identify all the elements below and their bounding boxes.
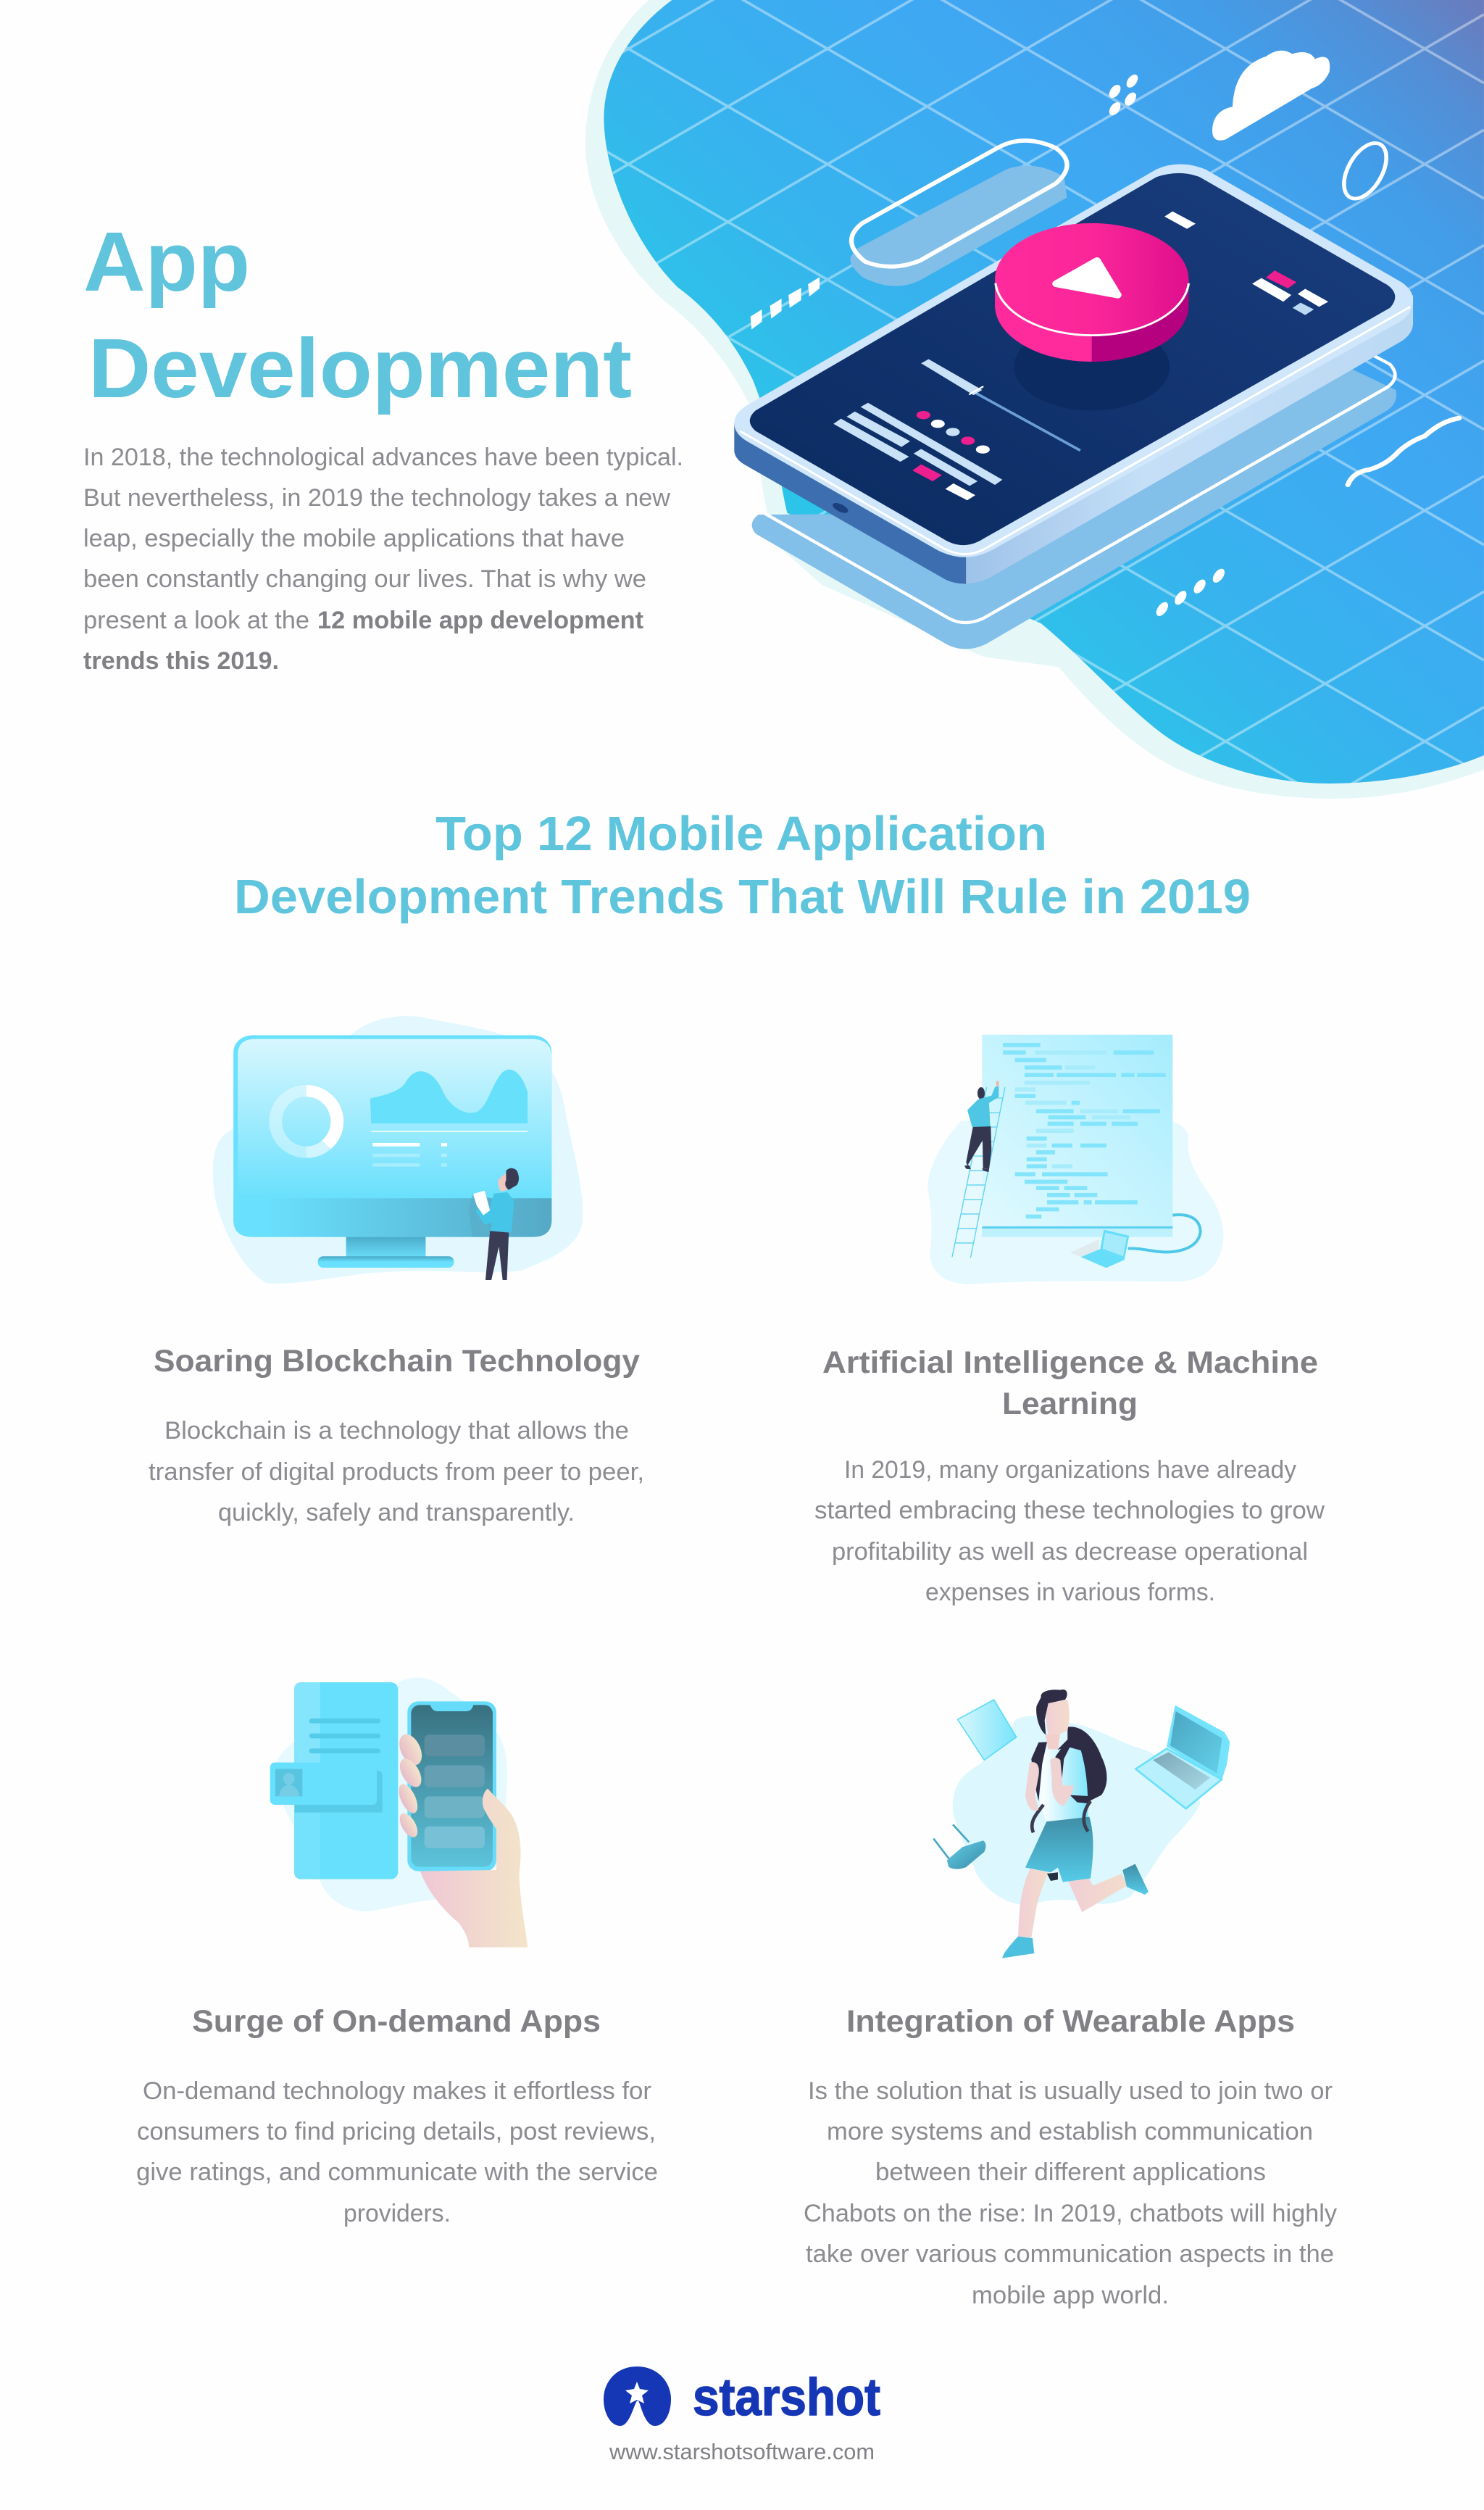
card text: transfer of digital products from peer to peer, bbox=[149, 1458, 644, 1486]
dangling straps bbox=[1032, 1801, 1091, 1832]
card text bbox=[136, 2077, 658, 2227]
intro text block: But nevertheless, in 2019 the technology takes a new bbox=[83, 484, 670, 512]
blue gradient blob bbox=[604, 0, 1484, 784]
panel: wearable apps bbox=[804, 1690, 1337, 2309]
title: Development bbox=[88, 321, 632, 415]
card text: In 2019, many organizations have already bbox=[844, 1456, 1296, 1484]
hero illustration: phone on isometric grid bbox=[585, 0, 1484, 799]
card text bbox=[814, 1456, 1325, 1606]
laptop bbox=[1070, 1230, 1129, 1268]
card text: profitability as well as decrease operational bbox=[832, 1538, 1308, 1566]
monitor stand bbox=[318, 1237, 454, 1268]
monitor body bbox=[233, 1035, 551, 1237]
faint code lines bbox=[1015, 1050, 1130, 1168]
intro text block: trends this 2019. bbox=[83, 647, 279, 675]
right strap bbox=[1056, 1740, 1070, 1790]
panel: artificial intelligence bbox=[814, 1035, 1325, 1606]
card text: take over various communication aspects in the bbox=[806, 2240, 1334, 2268]
icon: lower dots bbox=[1154, 567, 1227, 618]
icon: wavy line bbox=[1348, 418, 1459, 485]
code page bbox=[982, 1035, 1172, 1237]
card text: quickly, safely and transparently. bbox=[218, 1499, 575, 1526]
panel: on-demand apps bbox=[136, 1677, 658, 2227]
person on ladder bbox=[964, 1081, 999, 1172]
backdrop blob bbox=[928, 1121, 1223, 1284]
panel: blockchain bbox=[149, 1016, 644, 1526]
backdrop blob bbox=[953, 1716, 1201, 1905]
back ladder bbox=[988, 1087, 1007, 1225]
icon: dashes bbox=[751, 277, 820, 329]
backpack bbox=[1056, 1726, 1106, 1803]
hair bbox=[1036, 1690, 1067, 1734]
legend rows bbox=[372, 1143, 447, 1167]
phone bbox=[734, 165, 1413, 584]
speaker slot bbox=[831, 501, 850, 515]
icon: starshot mark bbox=[604, 2366, 671, 2426]
tablet bbox=[958, 1700, 1017, 1760]
title: App bbox=[83, 215, 250, 309]
card text: Blockchain is a technology that allows the bbox=[164, 1417, 629, 1445]
pill shape bbox=[850, 141, 1067, 286]
intro text block: In 2018, the technological advances have been typical. bbox=[83, 444, 683, 471]
router bbox=[933, 1824, 985, 1869]
card title: Integration of Wearable Apps bbox=[846, 2004, 1295, 2039]
back shoe bbox=[1122, 1864, 1149, 1895]
person with paper bbox=[469, 1168, 519, 1280]
backdrop blob bbox=[273, 1677, 507, 1911]
section heading: Development Trends That Will Rule in 2019 bbox=[234, 870, 1251, 924]
front ladder bbox=[952, 1087, 1005, 1258]
icon: upper dots bbox=[1107, 72, 1141, 117]
phone screen bbox=[750, 173, 1395, 545]
card text: Chabots on the rise: In 2019, chatbots will highly bbox=[804, 2200, 1337, 2227]
back leg bbox=[1067, 1874, 1127, 1912]
running man bbox=[1002, 1690, 1149, 1958]
website url: www.starshotsoftware.com bbox=[609, 2439, 875, 2464]
intro text block: leap, especially the mobile applications that have bbox=[83, 525, 625, 552]
hand bbox=[420, 1789, 528, 1948]
card text: give ratings, and communicate with the service bbox=[136, 2158, 658, 2186]
card text: On-demand technology makes it effortless for bbox=[143, 2077, 651, 2105]
card title: Soaring Blockchain Technology bbox=[154, 1344, 640, 1379]
screen slider bbox=[921, 360, 1080, 451]
code lines bbox=[1003, 1043, 1166, 1218]
reflection plate under phone bbox=[752, 355, 1396, 649]
phone frame bbox=[734, 165, 1413, 557]
intro text block bbox=[83, 444, 683, 675]
card text: consumers to find pricing details, post reviews, bbox=[137, 2118, 656, 2145]
screen text bars bbox=[833, 403, 1002, 500]
card text: providers. bbox=[343, 2200, 451, 2227]
shirt bbox=[1040, 1747, 1088, 1821]
illustration: code page and ladder bbox=[928, 1035, 1223, 1284]
document card bbox=[294, 1682, 398, 1879]
pale outer blob bbox=[585, 0, 1484, 799]
card text: more systems and establish communication bbox=[827, 2118, 1313, 2145]
isometric grid bbox=[607, 0, 1484, 783]
shorts bbox=[1025, 1817, 1093, 1882]
screen top dash bbox=[1164, 212, 1196, 229]
intro text block: 12 mobile app development bbox=[317, 607, 643, 634]
face bbox=[1046, 1700, 1070, 1735]
card title bbox=[822, 1345, 1318, 1421]
donut chart bbox=[275, 1091, 337, 1152]
laptop bbox=[1135, 1705, 1230, 1808]
card title: Artificial Intelligence & Machine bbox=[822, 1345, 1318, 1380]
neck bbox=[1046, 1732, 1060, 1749]
illustration: hand holding phone bbox=[270, 1677, 528, 1948]
card text bbox=[149, 1417, 644, 1526]
backdrop blob bbox=[213, 1016, 583, 1284]
screen dots bbox=[917, 411, 990, 454]
phone bbox=[407, 1701, 496, 1871]
section heading: Top 12 Mobile Application bbox=[435, 807, 1047, 861]
card text: started embracing these technologies to grow bbox=[814, 1497, 1325, 1524]
illustration: monitor bbox=[213, 1016, 583, 1284]
title bbox=[83, 215, 632, 415]
logo wordmark: starshot bbox=[693, 2369, 880, 2427]
card text bbox=[804, 2077, 1337, 2309]
intro text block: been constantly changing our lives. That is why we bbox=[83, 565, 646, 593]
icon: cloud bbox=[1212, 51, 1330, 141]
card text: mobile app world. bbox=[972, 2282, 1169, 2309]
phone left side bbox=[734, 423, 966, 584]
card text: expenses in various forms. bbox=[925, 1579, 1215, 1606]
arms bbox=[1025, 1762, 1039, 1811]
front shoe bbox=[1002, 1937, 1034, 1958]
phone right side bbox=[966, 295, 1413, 584]
intro text block: present a look at the bbox=[83, 607, 309, 634]
front leg bbox=[1018, 1869, 1049, 1937]
card title: Learning bbox=[1002, 1387, 1138, 1421]
card text: Is the solution that is usually used to join two or bbox=[808, 2077, 1333, 2105]
section heading bbox=[234, 807, 1251, 924]
cable bbox=[1128, 1215, 1201, 1252]
play button bbox=[995, 223, 1188, 362]
left strap bbox=[1031, 1742, 1047, 1801]
button shadow bbox=[1014, 323, 1170, 410]
area chart bbox=[370, 1070, 528, 1131]
profile card bbox=[270, 1763, 377, 1805]
footer logo bbox=[604, 2366, 880, 2464]
fingers bbox=[395, 1731, 426, 1840]
card title: Surge of On-demand Apps bbox=[192, 2004, 601, 2039]
icon: ring bbox=[1335, 138, 1395, 204]
illustration: running man with devices bbox=[933, 1690, 1230, 1958]
screen right cluster bbox=[1252, 270, 1328, 315]
card text: between their different applications bbox=[875, 2158, 1266, 2186]
